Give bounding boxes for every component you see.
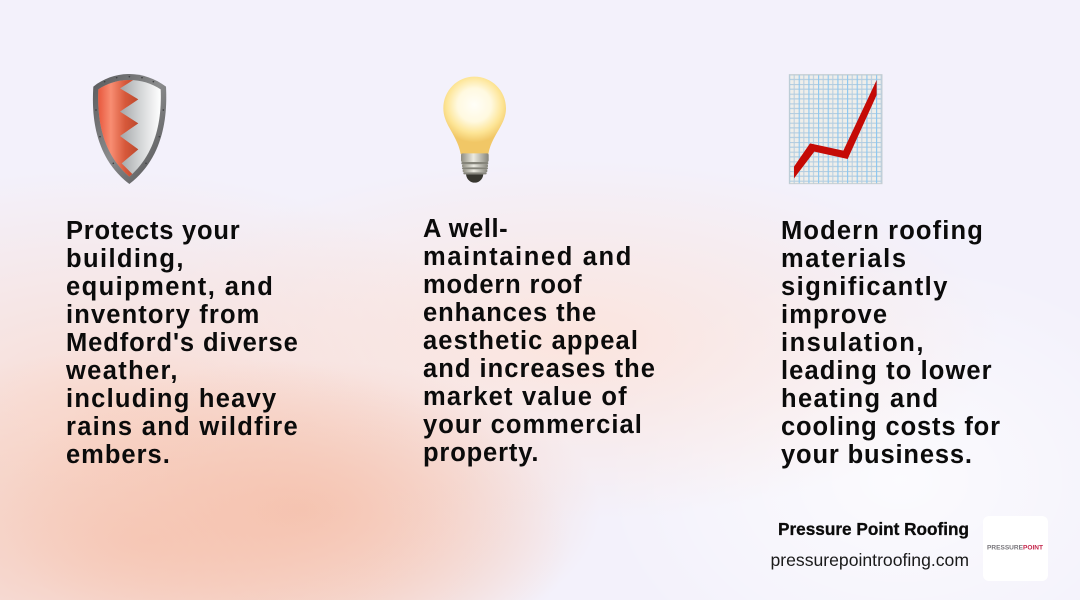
text: property value: and increases the [423, 355, 656, 383]
text: energy savings: insulation, [781, 329, 925, 357]
icon: light bulb [443, 76, 506, 183]
logo: PRESSURE [987, 546, 1023, 552]
text: property value: A well- [423, 215, 508, 243]
logo [983, 516, 1048, 581]
icon: shield [92, 74, 166, 184]
text: protection: equipment, and [66, 273, 274, 301]
text: energy savings [781, 217, 1001, 469]
logo: POINT [1023, 546, 1043, 552]
text: protection: embers. [66, 441, 171, 469]
text: property value: property. [423, 439, 539, 467]
icon: rising chart [788, 74, 882, 184]
text: protection: weather, [66, 357, 179, 385]
text: energy savings: improve [781, 301, 888, 329]
text: protection: inventory from [66, 301, 260, 329]
text: property value: maintained and [423, 243, 633, 271]
text: energy savings: materials [781, 245, 908, 273]
text: protection: Protects your [66, 217, 240, 245]
text: property value: your commercial [423, 411, 643, 439]
brand name: Pressure Point Roofing [778, 519, 969, 539]
text: protection: Medford's diverse [66, 329, 299, 357]
text: energy savings: significantly [781, 273, 949, 301]
text: protection: rains and wildfire [66, 413, 299, 441]
text: property value: enhances the [423, 299, 597, 327]
text: property value [423, 215, 656, 467]
text: property value: market value of [423, 383, 628, 411]
website: pressurepointroofing.com [770, 550, 969, 570]
text: energy savings: leading to lower [781, 357, 993, 385]
text: property value: aesthetic appeal [423, 327, 639, 355]
text: energy savings: heating and [781, 385, 940, 413]
text: protection: including heavy [66, 385, 277, 413]
text: energy savings: Modern roofing [781, 217, 984, 245]
text: property value: modern roof [423, 271, 583, 299]
text: energy savings: cooling costs for [781, 413, 1001, 441]
text: protection [66, 217, 299, 469]
text: protection: building, [66, 245, 185, 273]
text: energy savings: your business. [781, 441, 973, 469]
